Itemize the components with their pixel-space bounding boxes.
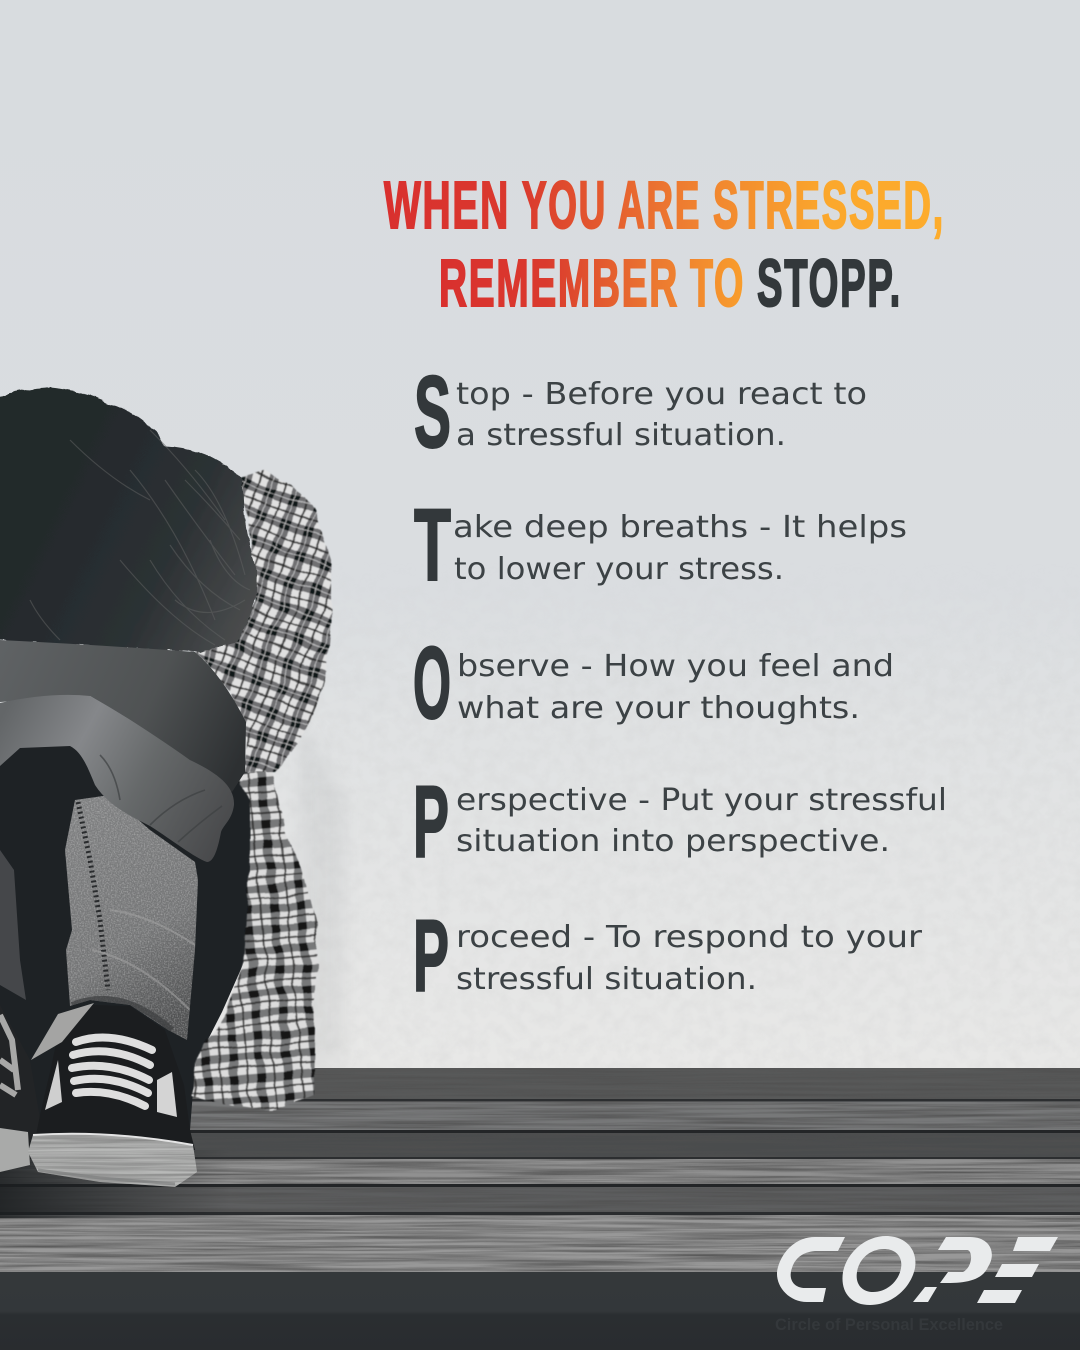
heading line 2: STOPP. [757, 246, 902, 321]
far leg [0, 850, 26, 1000]
heading line 1: YOU [522, 168, 607, 243]
logo letter O [842, 1236, 915, 1305]
list item: Stop: a stressful situation. [456, 418, 786, 453]
logo tagline: Circle of Personal Excellence [775, 1315, 1003, 1334]
jeans [65, 796, 198, 1040]
background wall [210, 743, 1080, 1068]
list item: Stop: top - Before you react to [456, 377, 867, 412]
upper shirt sleeve [195, 470, 331, 772]
heading line 2: REMEMBER [439, 246, 679, 321]
photo: person sitting with head on arms [0, 387, 331, 1190]
left shoe laces [0, 1015, 18, 1095]
left shoe [0, 1005, 42, 1170]
list item: Take deep breaths: to lower your stress. [454, 552, 784, 587]
list item: Stop [414, 355, 867, 469]
right shoe [25, 1003, 200, 1190]
logo letter P [913, 1237, 992, 1302]
list item: Perspective: erspective - Put your stressful [456, 783, 947, 818]
list item: Observe [413, 626, 894, 740]
list item: Proceed: P [413, 899, 449, 1013]
logo letter C [777, 1237, 845, 1302]
body shadow [0, 725, 252, 1130]
forearm and hand [0, 695, 234, 862]
logo: COPE [777, 1236, 1058, 1305]
heading line 1 [384, 168, 945, 243]
list item: Observe: O [413, 626, 451, 740]
heading line 1: WHEN [384, 168, 510, 243]
list item: Proceed [413, 899, 923, 1013]
hair [0, 387, 256, 652]
heading [384, 168, 945, 321]
list item: Observe: what are your thoughts. [457, 691, 860, 726]
list item: Take deep breaths: T [414, 488, 451, 602]
logo letter E bars [977, 1237, 1058, 1303]
list item: Take deep breaths [414, 488, 907, 602]
list item: Stop: S [414, 355, 451, 469]
list item: Proceed: stressful situation. [456, 962, 757, 997]
heading line 1: ARE [618, 168, 701, 243]
list item: Perspective [413, 765, 947, 879]
list item: Proceed: roceed - To respond to your [456, 920, 923, 955]
list item: Perspective: P [413, 765, 449, 879]
lower shirt tail [192, 768, 318, 1111]
list item: Take deep breaths: ake deep breaths - It helps [453, 510, 907, 545]
list item: Perspective: situation into perspective. [456, 824, 890, 859]
upper arm [0, 640, 246, 792]
list item: Observe: bserve - How you feel and [457, 649, 894, 684]
left shoe sole [0, 1128, 30, 1172]
wooden floor [0, 1068, 1080, 1350]
hand finger creases [100, 755, 222, 842]
heading line 2: TO [690, 246, 745, 321]
